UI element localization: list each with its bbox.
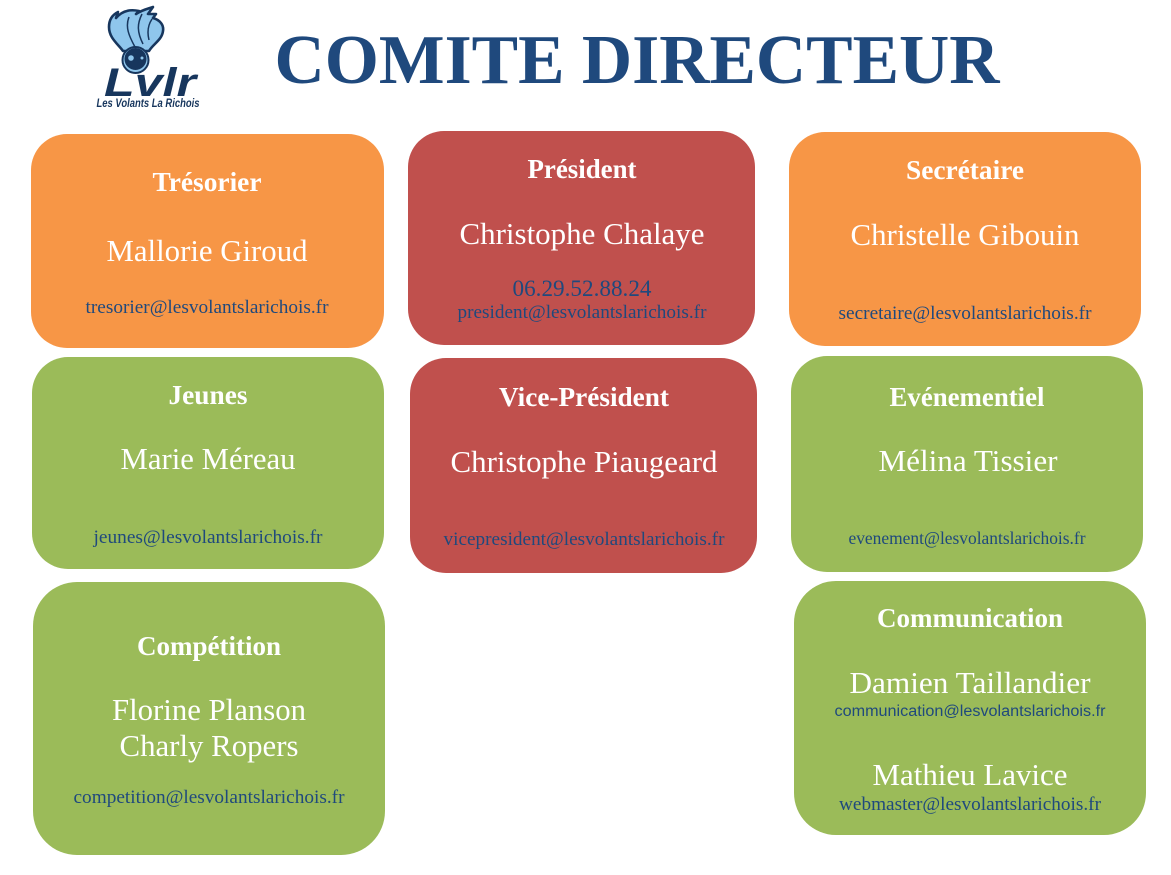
heading: Compétition: Compétition (137, 631, 281, 661)
panel: Trésorier (31, 134, 384, 348)
phone: 06.29.52.88.24 (512, 276, 652, 301)
logo tagline: Les Volants La Richois (96, 96, 200, 110)
name: Christophe Chalaye: Christophe Chalaye (460, 216, 704, 251)
icon: shuttlecock (109, 7, 163, 73)
name: Mallorie Giroud: Mallorie Giroud (106, 233, 308, 268)
panel: Président (408, 131, 755, 345)
email: événement: evenement@lesvolantslarichois.fr (848, 528, 1086, 548)
panel: Evénementiel (791, 356, 1143, 572)
heading: Jeunes: Jeunes (168, 380, 248, 410)
name: Charly Ropers: Charly Ropers (120, 728, 298, 763)
panel: Communication (794, 581, 1146, 835)
heading: Evénementiel: Evénementiel (890, 382, 1045, 412)
heading: Vice-Président: Vice-Président (499, 382, 669, 412)
name: Christelle Gibouin: Christelle Gibouin (850, 217, 1080, 252)
name: Christophe Piaugeard: Christophe Piaugeard (450, 444, 718, 479)
email: jeunes: jeunes@lesvolantslarichois.fr (92, 527, 323, 548)
name: Mathieu Lavice: Mathieu Lavice (872, 757, 1068, 792)
email: trésorier: tresorier@lesvolantslarichois.fr (86, 297, 329, 318)
heading: Secrétaire: Secrétaire (906, 155, 1024, 185)
email: vice-président: vicepresident@lesvolantslarichois.fr (444, 529, 725, 550)
name: Florine Planson: Florine Planson (112, 692, 306, 727)
panel: Vice-Président (410, 358, 757, 573)
email: compétition: competition@lesvolantslarichois.fr (74, 787, 345, 808)
panel: Secrétaire (789, 132, 1141, 346)
logo letters: Lvlr (104, 61, 199, 105)
name: Marie Méreau: Marie Méreau (120, 441, 296, 476)
logo: Les Volants La Richois (96, 7, 200, 110)
name: Damien Taillandier: Damien Taillandier (850, 665, 1091, 700)
heading: Communication: Communication (877, 603, 1063, 633)
email: président: president@lesvolantslarichois.fr (458, 302, 707, 323)
heading: Trésorier: Trésorier (152, 167, 262, 197)
panel: Jeunes (32, 357, 384, 569)
heading: Président: Président (528, 154, 637, 184)
email: secrétaire: secretaire@lesvolantslarichois.fr (838, 303, 1092, 324)
title: COMITE DIRECTEUR (274, 22, 1001, 99)
panel: Compétition (33, 582, 385, 855)
name: Mélina Tissier: Mélina Tissier (878, 443, 1058, 478)
email: communication: communication@lesvolantslarichois.fr (834, 703, 1106, 720)
email: webmaster: webmaster@lesvolantslarichois.fr (839, 794, 1102, 815)
